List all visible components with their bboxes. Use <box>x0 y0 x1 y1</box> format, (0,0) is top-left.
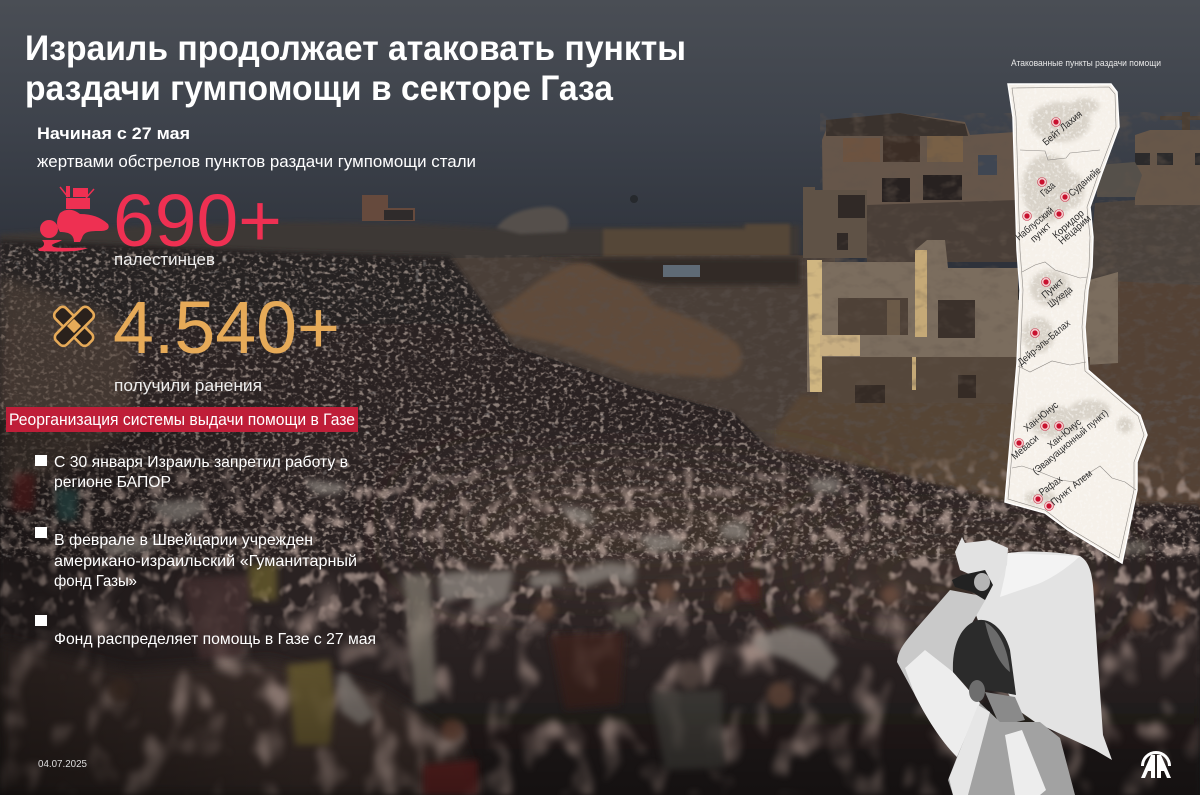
attack site markers <box>1014 118 1070 510</box>
warm crowd haze right <box>790 530 1110 610</box>
bullet 3 <box>35 615 376 648</box>
crowd <box>0 230 1200 795</box>
icon: person under aid load <box>38 186 109 252</box>
place labels: Хан-Юнус <box>1022 400 1061 434</box>
middle crowd texture <box>0 440 1200 650</box>
stat: killed <box>113 179 282 269</box>
near crowd texture <box>0 570 1200 795</box>
place labels: Рафах <box>1037 473 1065 498</box>
map of Gaza Strip <box>1005 84 1147 564</box>
left sandy slope <box>0 275 135 500</box>
AA logo <box>1141 751 1171 778</box>
ruined building: main block <box>805 240 1120 405</box>
sack <box>973 552 1112 760</box>
caption: получили ранения <box>114 376 262 395</box>
crowd base <box>0 240 1200 795</box>
wristwatch <box>952 570 993 600</box>
place labels: пункт <box>1029 221 1054 245</box>
right side terrain <box>775 195 1200 510</box>
place labels: Пункт Алем <box>1049 468 1095 508</box>
bullet 2: американо-израильский «Гуманитарный <box>54 553 357 570</box>
inner boundary lines <box>1008 87 1144 558</box>
place labels: Нецарим <box>1057 213 1093 247</box>
bullet 2: В феврале в Швейцарии учрежден <box>54 532 313 549</box>
map outline <box>1005 84 1147 563</box>
date: 04.07.2025 <box>38 759 87 770</box>
bullet 2 <box>35 527 357 590</box>
distant rubble band <box>0 195 800 300</box>
intro text <box>37 124 476 171</box>
place labels: Шухеда <box>1046 284 1075 310</box>
sacks <box>102 480 1148 723</box>
neck <box>985 692 1025 726</box>
map title: Атакованные пункты раздачи помощи <box>1011 58 1161 69</box>
ruined building: upper block <box>820 113 1017 263</box>
number 690+: 690+ <box>113 179 282 262</box>
rocky foreground <box>0 640 480 795</box>
icon: crossed bandages <box>52 305 96 348</box>
title <box>25 29 686 108</box>
head <box>953 620 1016 695</box>
place labels: Газа <box>1039 180 1058 199</box>
shirts <box>287 660 335 745</box>
red banner heading: Реорганизация системы выдачи помощи в Газе <box>9 410 355 429</box>
intro text: Начиная с 27 мая <box>37 124 190 143</box>
bullet 1 <box>35 454 348 491</box>
ruined building: left annex <box>803 187 867 258</box>
man carrying aid sack <box>897 537 1112 795</box>
shirt <box>948 703 1075 795</box>
bullet 3: Фонд распределяет помощь в Газе с 27 мая <box>54 631 376 648</box>
fist <box>955 537 1008 585</box>
place labels: (Эвакуационный пункт) <box>1031 408 1111 477</box>
bullet list <box>35 454 376 648</box>
title: раздачи гумпомощи в секторе Газа <box>25 69 613 108</box>
urban areas <box>1020 96 1134 506</box>
place labels: Бейт Лахия <box>1041 109 1085 148</box>
title: Израиль продолжает атаковать пункты <box>25 29 686 68</box>
ruined building: right block <box>1095 112 1200 282</box>
place labels: Коридор <box>1051 208 1087 241</box>
stat: wounded <box>113 286 340 395</box>
bottom dark vignette <box>0 640 1200 795</box>
number 4.540+: 4.540+ <box>113 286 340 369</box>
place labels: Суданийе <box>1067 165 1104 199</box>
place labels: Меваси <box>1010 433 1041 462</box>
sandy hills and road <box>388 255 835 470</box>
foreground figures and sacks <box>12 473 1189 795</box>
place labels <box>1010 109 1111 508</box>
far crowd texture <box>0 230 1200 570</box>
bullet 2: фонд Газы» <box>54 573 137 590</box>
warm crowd haze <box>410 480 870 580</box>
place labels: Хан-Юнус <box>1046 417 1084 451</box>
arm <box>897 590 987 757</box>
sky <box>0 0 1200 290</box>
intro text: жертвами обстрелов пунктов раздачи гумпомощи стали <box>37 152 476 171</box>
place labels: Пункт <box>1040 277 1066 301</box>
left dark vignette <box>0 420 300 795</box>
place labels: Наблусский <box>1013 205 1056 243</box>
bullet 1: регионе БАПОР <box>54 474 171 491</box>
place labels: Дейр-эль-Балах <box>1016 318 1073 368</box>
faces <box>108 581 1189 741</box>
caption: палестинцев <box>114 250 215 269</box>
bullet 1: С 30 января Израиль запретил работу в <box>54 454 348 471</box>
